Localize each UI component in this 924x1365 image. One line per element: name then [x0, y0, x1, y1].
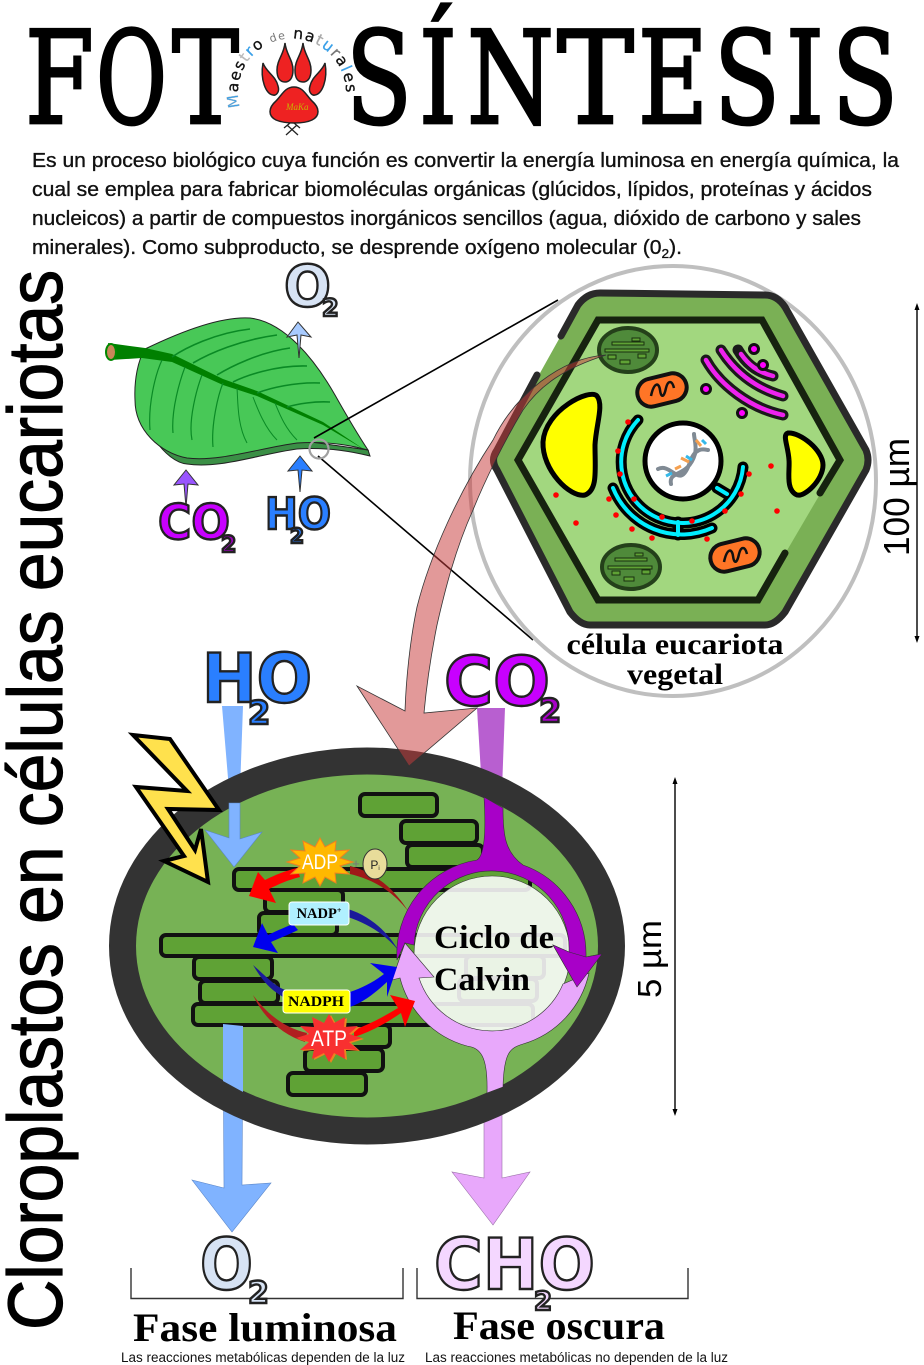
- heading: Fase luminosa: [121, 1305, 405, 1365]
- caption: luminosa: Las reacciones metabólicas dependen de la luz: [121, 1350, 405, 1365]
- icon: paw logo: Maestro de naturales: [226, 30, 355, 108]
- title: Í: [419, 4, 457, 154]
- title: I: [786, 5, 824, 154]
- arrows: blue NADP: [253, 909, 398, 1007]
- scale: 5 um: [631, 777, 678, 1116]
- cycle label: Ciclo de: [434, 920, 554, 956]
- label: H2O small: 2: [290, 524, 304, 548]
- label: O2 small: O: [284, 254, 331, 320]
- scale: 100 um: [876, 303, 920, 643]
- cell: mitochondria: [634, 370, 763, 575]
- label: CO2 large: 2: [539, 692, 561, 730]
- label: O2 small: 2: [322, 294, 339, 322]
- label: CH2O bottom: 2: [534, 1287, 552, 1317]
- label: Pi: P: [370, 858, 378, 872]
- label: ATP star: ATP: [311, 1026, 347, 1051]
- label: CH2O bottom: CHO: [434, 1224, 595, 1306]
- title: T: [557, 5, 634, 154]
- title: O: [96, 5, 167, 154]
- title: S: [346, 5, 412, 154]
- title: N: [467, 5, 554, 154]
- Calvin cycle: [392, 797, 602, 1093]
- label: ADP star: ADP: [302, 851, 338, 874]
- cycle label: Calvin: [434, 962, 530, 998]
- label: H2O large: 2: [248, 694, 270, 732]
- text block: intro: 2: [662, 246, 669, 261]
- thylakoid stacks: [161, 794, 565, 1095]
- label: H2O large: HO: [202, 640, 312, 719]
- cycle: purple arrow head: [553, 945, 602, 987]
- panel: chloroplast: [109, 748, 625, 1144]
- magnifier circle on leaf: [310, 440, 328, 458]
- brackets: [131, 1268, 688, 1298]
- scale: 100 um: 100 µm: [876, 438, 917, 556]
- cell: golgi: [702, 344, 783, 418]
- cell label: vegetal: [627, 658, 723, 691]
- label: H2O small: HO: [265, 489, 331, 540]
- label: O2 bottom: 2: [248, 1276, 269, 1311]
- zoom lines: [314, 300, 558, 640]
- label: NADPH: [283, 990, 350, 1013]
- label: Pi: [352, 849, 387, 879]
- text block: intro: nucleicos) a partir de compuestos inorgánicos sencillos (agua, dióxido de carbono y sales: [32, 208, 861, 230]
- label: NADP+: NADP: [297, 906, 337, 922]
- cycle: purple CO2 branch: [397, 797, 602, 987]
- title: E: [638, 5, 708, 154]
- arrow: H2O to leaf: [288, 456, 312, 492]
- label: Pi: i: [378, 866, 380, 872]
- scale: 5 um: 5 µm: [631, 920, 668, 998]
- cycle: pink product branch: [392, 943, 589, 1093]
- heading: Fase luminosa: Fase luminosa: [133, 1305, 397, 1350]
- cell: nucleus with DNA: [645, 423, 721, 499]
- icon: lightning bolt: [133, 735, 219, 882]
- icon: paw logo: [226, 30, 355, 136]
- text block: intro: Es un proceso biológico cuya función es convertir la energía luminosa en energía química, la: [32, 150, 900, 172]
- arrow: oxygen inner shaft: [223, 1024, 243, 1092]
- icon: paw logo: MaKa: [285, 102, 309, 112]
- text block: intro: minerales). Como subproducto, se desprende oxígeno molecular (0: [32, 237, 630, 259]
- title: F: [25, 5, 94, 154]
- title: [25, 4, 898, 154]
- label: CO2 small: CO: [158, 495, 230, 551]
- leaf illustration: [106, 318, 370, 465]
- label: CO2 small: 2: [221, 533, 236, 558]
- title: S: [832, 5, 898, 154]
- cell label: [566, 628, 784, 691]
- heading: Fase oscura: [425, 1303, 728, 1365]
- label: Pi: +: [352, 856, 360, 871]
- title: T: [172, 5, 239, 154]
- label: O2 bottom: O: [200, 1224, 253, 1306]
- label: CO2 large: CO: [444, 643, 550, 722]
- arrow shafts behind chloroplast: [192, 706, 530, 1232]
- text block: intro: cual se emplea para fabricar biomoléculas orgánicas (glúcidos, lípidos, proteínas y ácidos: [32, 179, 872, 201]
- label: NADPH: NADPH: [288, 994, 345, 1010]
- cycle label: [434, 920, 554, 998]
- arrow: water entering: [205, 803, 262, 867]
- text block: intro: ).: [669, 237, 682, 259]
- cell: vacuoles: [543, 394, 823, 495]
- arrow: O2 from leaf: [287, 322, 311, 358]
- cell: reticulum: [613, 420, 743, 535]
- label: NADP+: +: [337, 906, 342, 915]
- cell: ribosomes: [553, 419, 780, 542]
- arrow: pink zoom arrow from cell chloroplast: [357, 355, 606, 766]
- label: ATP star: [296, 1014, 364, 1063]
- caption: oscura: Las reacciones metabólicas no dependen de la luz: [425, 1350, 728, 1365]
- cell: chloroplasts: [599, 328, 660, 589]
- text block: intro: [32, 150, 900, 261]
- cell label: célula eucariota: [566, 628, 784, 661]
- arrow: CO2 to leaf: [174, 470, 198, 507]
- label: NADP+: [289, 902, 349, 925]
- arrows: red ATP/ADP: [249, 866, 415, 1042]
- heading: Fase oscura: Fase oscura: [453, 1303, 665, 1348]
- panel: plant cell: [470, 266, 876, 696]
- label: ADP star: [287, 838, 353, 886]
- title: S: [714, 5, 780, 154]
